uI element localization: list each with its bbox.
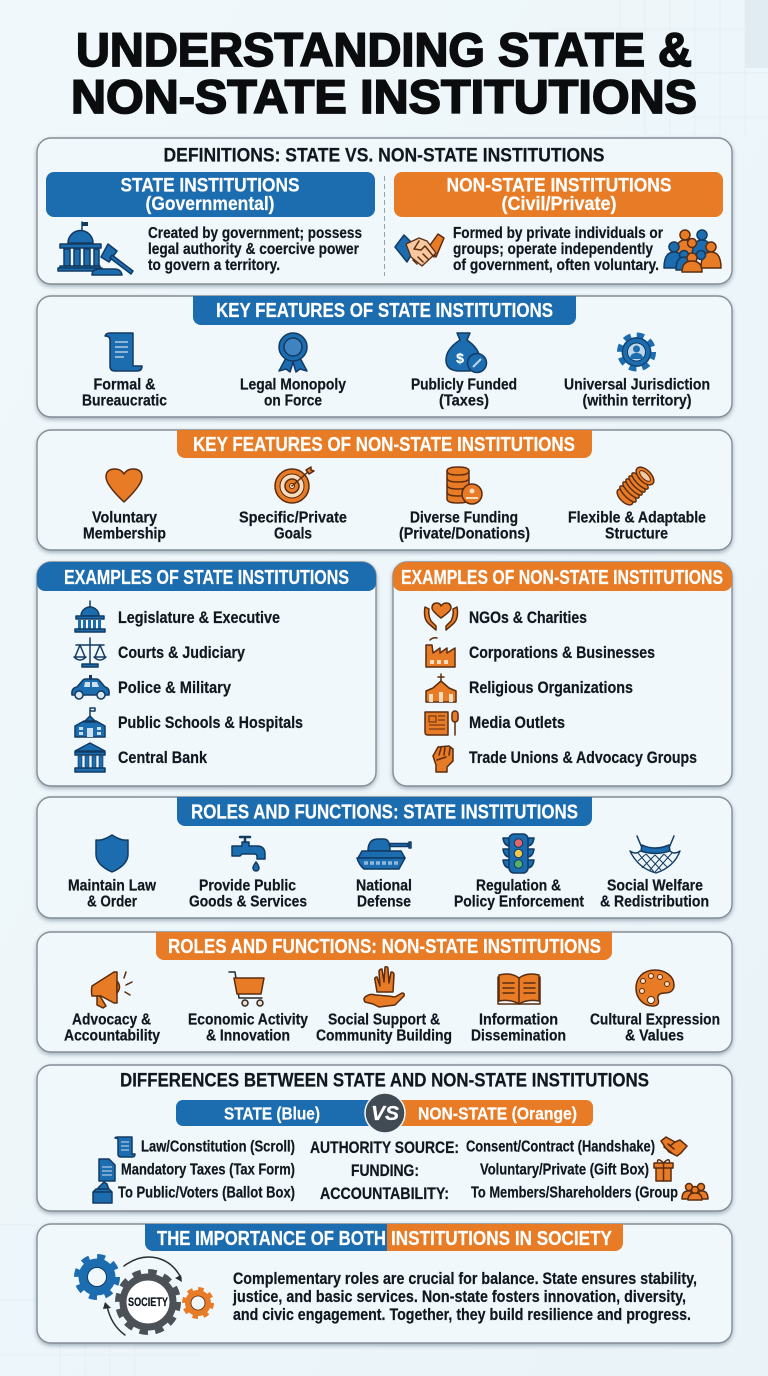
role: maintain law and order: & Order xyxy=(87,894,137,910)
role: social support: Social Support & xyxy=(328,1012,440,1028)
description: state xyxy=(148,225,362,274)
state institutions banner xyxy=(46,172,375,217)
description: non-state: Formed by private individuals or xyxy=(453,225,663,242)
example: media outlets: Media Outlets xyxy=(469,713,565,732)
example: corporations and businesses: Corporations & Businesses xyxy=(469,643,655,662)
description: non-state: groups; operate independently xyxy=(453,241,653,258)
summary paragraph: and civic engagement. Together, they build resilience and progress. xyxy=(233,1305,691,1324)
example: trade unions and advocacy groups: Trade Unions & Advocacy Groups xyxy=(469,748,697,767)
role: information dissemination xyxy=(471,974,566,1044)
banner: examples state: EXAMPLES OF STATE INSTITUTIONS xyxy=(64,566,349,589)
role: cultural expression: Cultural Expression xyxy=(590,1012,720,1028)
panel: differences xyxy=(37,1065,732,1211)
description: non-state: of government, often voluntary. xyxy=(453,257,659,274)
example: police and military xyxy=(72,675,231,699)
feature: flexible adaptable structure xyxy=(568,464,706,542)
role: cultural expression: & Values xyxy=(625,1028,684,1044)
role: maintain law and order: Maintain Law xyxy=(68,878,156,894)
feature: flexible adaptable structure: Flexible & Adaptable xyxy=(568,510,706,526)
role: cultural expression xyxy=(590,970,720,1044)
row: funding xyxy=(99,1159,673,1181)
role: maintain law and order xyxy=(68,835,156,910)
example: police and military: Police & Military xyxy=(118,678,231,697)
role: advocacy and accountability xyxy=(64,972,160,1044)
banner: importance xyxy=(145,1224,623,1251)
description: state: legal authority & coercive power xyxy=(148,241,359,258)
feature: diverse funding: (Private/Donations) xyxy=(399,526,530,542)
panel: definitions xyxy=(37,138,732,284)
banner: examples state xyxy=(37,562,376,591)
role: social support xyxy=(316,967,452,1044)
feature: diverse funding xyxy=(399,467,530,542)
summary paragraph xyxy=(232,1269,697,1324)
feature: voluntary membership: Membership xyxy=(83,526,166,542)
feature: publicly funded: (Taxes) xyxy=(439,392,489,410)
feature: formal and bureaucratic xyxy=(82,333,167,410)
banner: importance: THE IMPORTANCE OF BOTH xyxy=(157,1227,386,1250)
example: courts and judiciary: Courts & Judiciary xyxy=(118,643,245,662)
panel: examples of state institutions xyxy=(37,562,376,786)
feature: legal monopoly on force xyxy=(240,333,346,410)
role: information dissemination: Information xyxy=(479,1012,558,1028)
example: ngos and charities xyxy=(424,603,587,630)
feature: publicly funded: $ xyxy=(456,350,464,366)
row: authority source: AUTHORITY SOURCE: xyxy=(310,1139,459,1157)
feature: diverse funding: Diverse Funding xyxy=(410,510,518,526)
example: religious organizations xyxy=(426,674,633,702)
row: accountability xyxy=(93,1182,708,1203)
description: state: Created by government; possess xyxy=(148,225,362,242)
comparison bar with vs badge: VS xyxy=(371,1103,400,1125)
icon: handshake xyxy=(395,234,444,266)
icon: capitol and gavel xyxy=(58,222,133,275)
example: legislature and executive: Legislature & Executive xyxy=(118,608,280,627)
feature: specific private goals xyxy=(239,467,347,542)
role: social welfare and redistribution xyxy=(600,836,709,910)
role: social welfare and redistribution: Social Welfare xyxy=(607,878,703,894)
icon: gears around society xyxy=(76,1256,212,1335)
role: national defense xyxy=(356,839,412,910)
panel: importance of both institutions xyxy=(37,1224,732,1343)
role: economic activity: Economic Activity xyxy=(188,1012,308,1028)
description: non-state xyxy=(453,225,663,274)
banner: key features state xyxy=(193,296,576,325)
role: national defense: Defense xyxy=(357,894,411,910)
feature: voluntary membership: Voluntary xyxy=(92,510,157,526)
feature: publicly funded xyxy=(411,333,517,410)
row: funding: Voluntary/Private (Gift Box) xyxy=(480,1162,649,1178)
panel: key features of non-state institutions xyxy=(37,430,732,550)
state institutions banner: (Governmental) xyxy=(146,193,274,215)
example: central bank xyxy=(75,743,207,772)
feature: voluntary membership xyxy=(83,469,166,542)
example: trade unions and advocacy groups xyxy=(433,746,697,772)
feature: universal jurisdiction xyxy=(564,337,710,410)
banner: importance: INSTITUTIONS IN SOCIETY xyxy=(391,1227,612,1250)
row: authority source xyxy=(115,1137,687,1157)
summary paragraph: justice, and basic services. Non-state fosters innovation, diversity, xyxy=(232,1287,686,1306)
role: regulation and policy enforcement: Regulation & xyxy=(476,878,561,894)
feature: legal monopoly on force: Legal Monopoly xyxy=(240,376,346,394)
non-state institutions banner: NON-STATE INSTITUTIONS xyxy=(446,174,672,196)
row: authority source: Consent/Contract (Handshake) xyxy=(466,1138,655,1156)
panel: roles and functions state xyxy=(37,797,732,918)
example: media outlets xyxy=(425,711,565,735)
role: social welfare and redistribution: & Redistribution xyxy=(600,894,709,910)
panel: key features of state institutions xyxy=(37,296,732,417)
example: corporations and businesses xyxy=(426,638,655,667)
role: provide public goods xyxy=(189,837,307,910)
comparison bar with vs badge: STATE (Blue) xyxy=(224,1104,320,1124)
feature: formal and bureaucratic: Formal & xyxy=(94,376,156,394)
role: provide public goods: Provide Public xyxy=(199,878,296,894)
heading: definitions: DEFINITIONS: STATE VS. NON-STATE INSTITUTIONS xyxy=(164,144,604,166)
feature: specific private goals: Goals xyxy=(274,526,312,542)
role: regulation and policy enforcement xyxy=(454,834,585,910)
non-state institutions banner: (Civil/Private) xyxy=(502,193,616,215)
feature: universal jurisdiction: Universal Jurisdiction xyxy=(564,376,710,394)
comparison bar with vs badge: NON-STATE (Orange) xyxy=(418,1104,577,1124)
heading: differences: DIFFERENCES BETWEEN STATE AND NON-STATE INSTITUTIONS xyxy=(120,1070,649,1092)
role: economic activity: & Innovation xyxy=(206,1028,290,1044)
title xyxy=(71,23,697,123)
non-state institutions banner xyxy=(394,172,723,217)
row: authority source: Law/Constitution (Scroll) xyxy=(141,1138,295,1156)
banner: key features state: KEY FEATURES OF STATE INSTITUTIONS xyxy=(216,299,553,322)
role: national defense: National xyxy=(356,878,412,894)
role: information dissemination: Dissemination xyxy=(471,1028,566,1044)
row: accountability: ACCOUNTABILITY: xyxy=(320,1185,449,1203)
banner: roles state: ROLES AND FUNCTIONS: STATE INSTITUTIONS xyxy=(191,800,578,824)
role: regulation and policy enforcement: Policy Enforcement xyxy=(454,894,585,910)
row: funding: Mandatory Taxes (Tax Form) xyxy=(121,1162,295,1178)
example: legislature and executive xyxy=(75,601,280,632)
panel: roles and functions non-state xyxy=(37,932,732,1052)
role: advocacy and accountability: Advocacy & xyxy=(72,1012,151,1028)
banner: roles non-state: ROLES AND FUNCTIONS: NON-STATE INSTITUTIONS xyxy=(168,935,601,958)
title: UNDERSTANDING STATE & xyxy=(76,23,692,76)
feature: publicly funded: Publicly Funded xyxy=(411,376,517,394)
title: NON-STATE INSTITUTIONS xyxy=(71,70,697,123)
example: ngos and charities: NGOs & Charities xyxy=(469,608,587,627)
role: advocacy and accountability: Accountability xyxy=(64,1028,160,1044)
feature: legal monopoly on force: on Force xyxy=(264,392,322,410)
row: accountability: To Members/Shareholders (Group xyxy=(471,1184,678,1202)
feature: flexible adaptable structure: Structure xyxy=(605,526,668,542)
banner: roles state xyxy=(177,797,592,826)
role: social support: Community Building xyxy=(316,1028,452,1044)
panel: examples of non-state institutions xyxy=(393,562,732,786)
comparison bar with vs badge xyxy=(176,1093,593,1133)
banner: key features non-state: KEY FEATURES OF NON-STATE INSTITUTIONS xyxy=(193,433,575,456)
role: economic activity xyxy=(188,972,308,1044)
feature: formal and bureaucratic: Bureaucratic xyxy=(82,392,167,410)
feature: specific private goals: Specific/Private xyxy=(239,510,347,526)
icon: gears around society: SOCIETY xyxy=(128,1295,168,1309)
row: funding: FUNDING: xyxy=(351,1162,419,1180)
example: public schools and hospitals xyxy=(75,708,303,737)
role: provide public goods: Goods & Services xyxy=(189,894,307,910)
example: religious organizations: Religious Organizations xyxy=(469,678,633,697)
description: state: to govern a territory. xyxy=(148,257,280,274)
example: courts and judiciary xyxy=(74,638,245,667)
row: accountability: To Public/Voters (Ballot Box) xyxy=(118,1184,295,1202)
example: central bank: Central Bank xyxy=(118,748,207,767)
state institutions banner: STATE INSTITUTIONS xyxy=(120,174,300,196)
feature: universal jurisdiction: (within territory) xyxy=(582,392,692,410)
example: public schools and hospitals: Public Schools & Hospitals xyxy=(118,713,303,732)
icon: people group xyxy=(664,230,721,272)
